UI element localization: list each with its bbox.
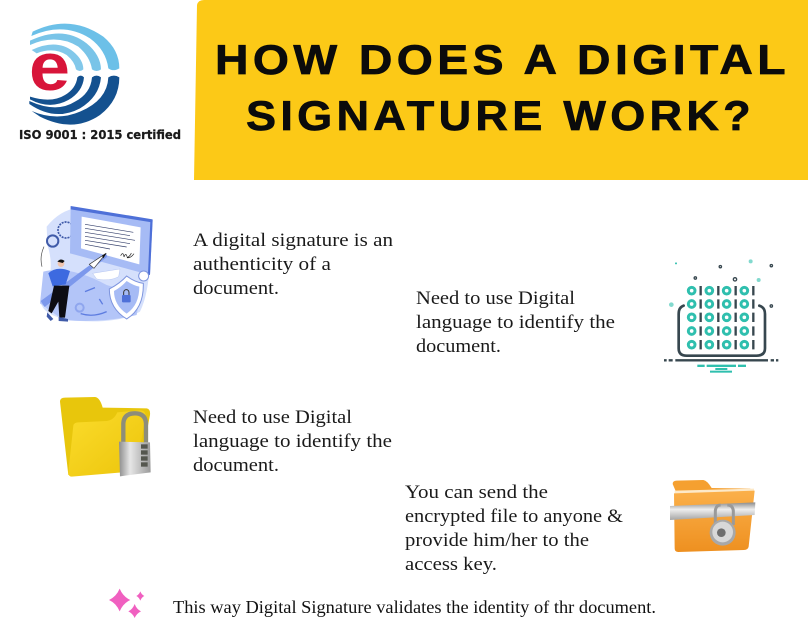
text block: digital signature definition: authenticity of a bbox=[193, 254, 332, 275]
text block: digital language right bbox=[416, 288, 615, 357]
logo arcs bbox=[29, 24, 119, 125]
text block: send encrypted file bbox=[405, 482, 623, 575]
text block: send encrypted file: You can send the bbox=[405, 482, 548, 503]
text block: digital language right: Need to use Digital bbox=[416, 288, 575, 309]
icon: yellow folder with padlock bbox=[60, 397, 151, 477]
logo bbox=[19, 24, 181, 142]
title: SIGNATURE WORK? bbox=[246, 92, 755, 139]
icon: binary code monitor bbox=[664, 259, 778, 373]
closing statement: This way Digital Signature validates the identity of thr document. bbox=[173, 597, 656, 617]
text block: send encrypted file: encrypted file to anyone & bbox=[405, 506, 623, 527]
text block: digital signature definition: document. bbox=[193, 278, 279, 299]
title banner bbox=[194, 0, 808, 180]
icon: pink sparkles bbox=[109, 589, 144, 618]
text block: digital language left bbox=[193, 407, 392, 476]
logo letter e: e bbox=[29, 29, 70, 105]
text block: send encrypted file: provide him/her to the bbox=[405, 530, 589, 551]
text block: digital language right: document. bbox=[416, 336, 501, 357]
text block: digital language left: Need to use Digital bbox=[193, 407, 352, 428]
ISO certification text: ISO 9001 : 2015 certified bbox=[19, 128, 181, 142]
text block: digital language left: language to identify the bbox=[193, 431, 392, 452]
text block: digital language left: document. bbox=[193, 455, 279, 476]
icon: orange folder with strap lock bbox=[670, 480, 755, 552]
text block: digital language right: language to identify the bbox=[416, 312, 615, 333]
text block: digital signature definition bbox=[193, 230, 394, 299]
title bbox=[215, 36, 790, 139]
icon: digital signature illustration bbox=[40, 206, 153, 322]
text block: digital signature definition: A digital signature is an bbox=[193, 230, 394, 251]
title: HOW DOES A DIGITAL bbox=[215, 36, 790, 83]
text block: send encrypted file: access key. bbox=[405, 554, 497, 575]
